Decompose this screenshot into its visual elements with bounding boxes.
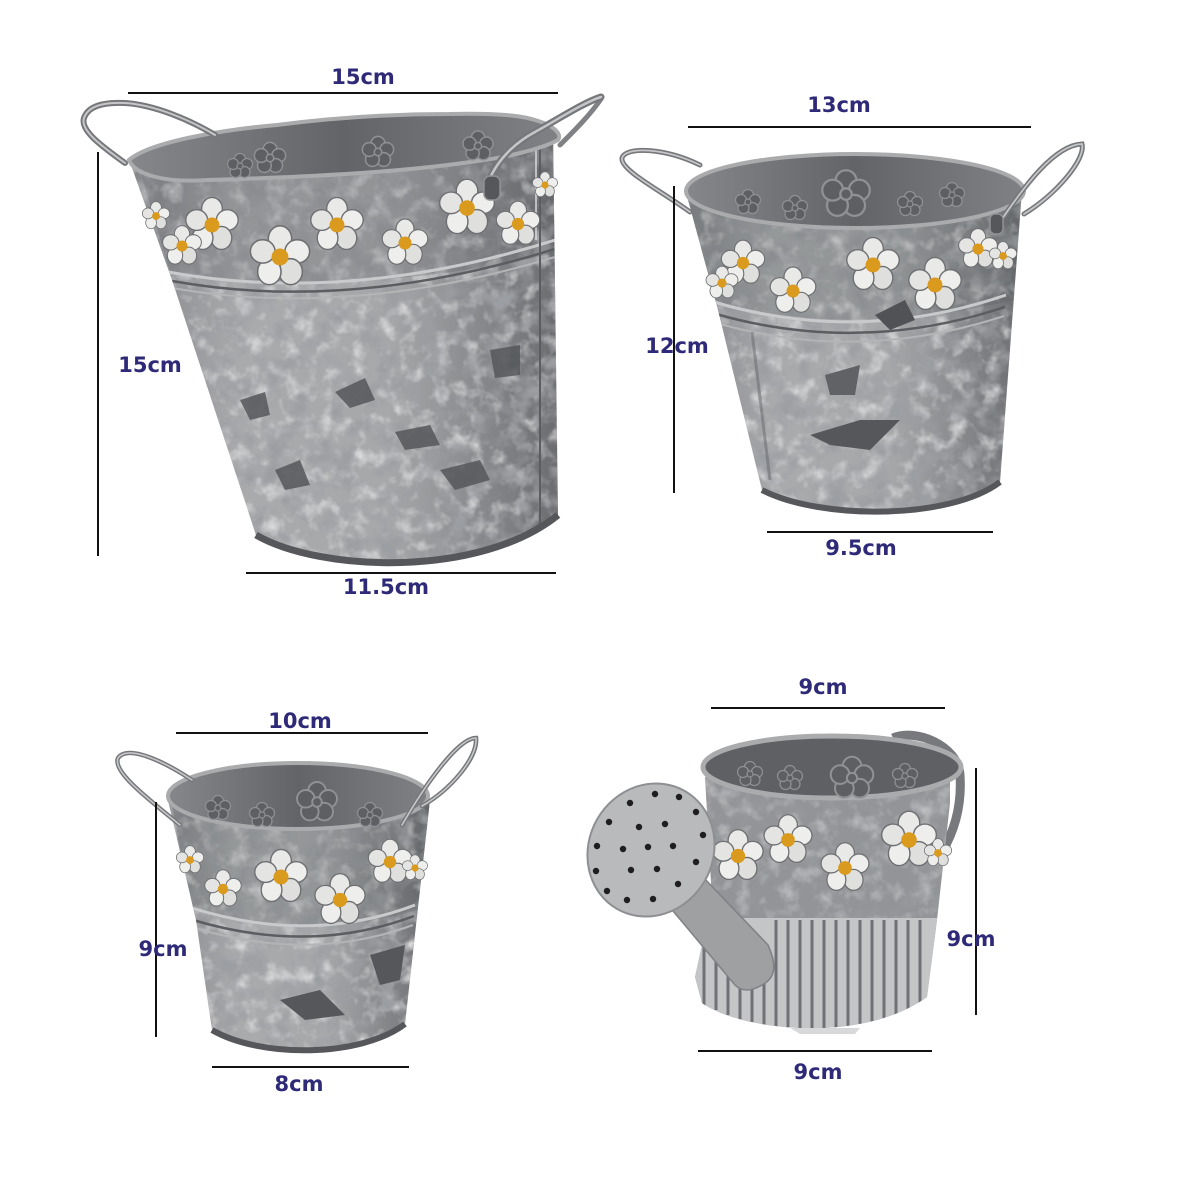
dimension: watering can base width: 9cm [794,1060,842,1084]
medium bucket rivet [990,214,1003,234]
dimension: watering can height: 9cm [947,927,995,951]
painted flowers [706,229,1017,312]
large bucket right handle [489,97,601,180]
small bucket body [168,800,430,1050]
dimension: small bucket top width: 10cm [268,709,332,733]
dimension: small bucket height: 9cm [139,937,187,961]
watering can inner opening [703,736,961,798]
dimension: small bucket base width: 8cm [275,1072,323,1096]
large bucket left handle [83,103,215,163]
dimension: medium bucket top width: 13cm [807,93,871,117]
watering can spout [668,877,774,990]
embossed flowers [738,757,918,798]
small bucket spangle texture [168,804,430,1048]
watering can handle [893,735,960,852]
embossed flowers [228,131,493,178]
medium bucket inner opening [686,154,1024,228]
dimension: watering can top width: 9cm [799,675,847,699]
medium bucket body [688,190,1022,512]
painted flowers [713,811,952,890]
bucket: small 10cm [117,738,476,1060]
small bucket left handle [117,753,192,825]
large bucket rivet [484,176,500,200]
large bucket body [131,130,558,563]
large bucket inner opening [129,114,559,181]
watering can body [695,775,950,1028]
dimension: large bucket top width: 15cm [331,65,395,89]
dimension: medium bucket base width: 9.5cm [825,536,897,560]
watering can rose head [563,760,739,940]
small bucket inner opening [168,763,428,829]
large bucket spangle texture [132,144,558,559]
small bucket base rim [212,1024,405,1050]
medium bucket right handle [1000,144,1082,222]
large bucket base rim [256,515,558,563]
medium bucket spangle texture [690,201,1022,508]
embossed flowers [736,170,964,220]
bucket: large 15cm [83,97,601,580]
icon: large bucket rear handle leg [560,99,601,145]
watering can texture and fluted base [690,775,955,1038]
painted flowers [142,172,558,285]
dimension: large bucket height: 15cm [118,353,182,377]
medium bucket base rim [762,482,1000,512]
small bucket right handle [402,738,476,825]
watering can [563,735,961,1038]
medium bucket left handle [622,150,700,212]
embossed flowers [206,782,382,826]
bucket: medium 13cm [622,144,1082,520]
dimension: medium bucket height: 12cm [645,334,709,358]
painted flowers [176,839,428,923]
watering can base patch [790,1028,860,1034]
dimension: large bucket base width: 11.5cm [343,575,429,599]
